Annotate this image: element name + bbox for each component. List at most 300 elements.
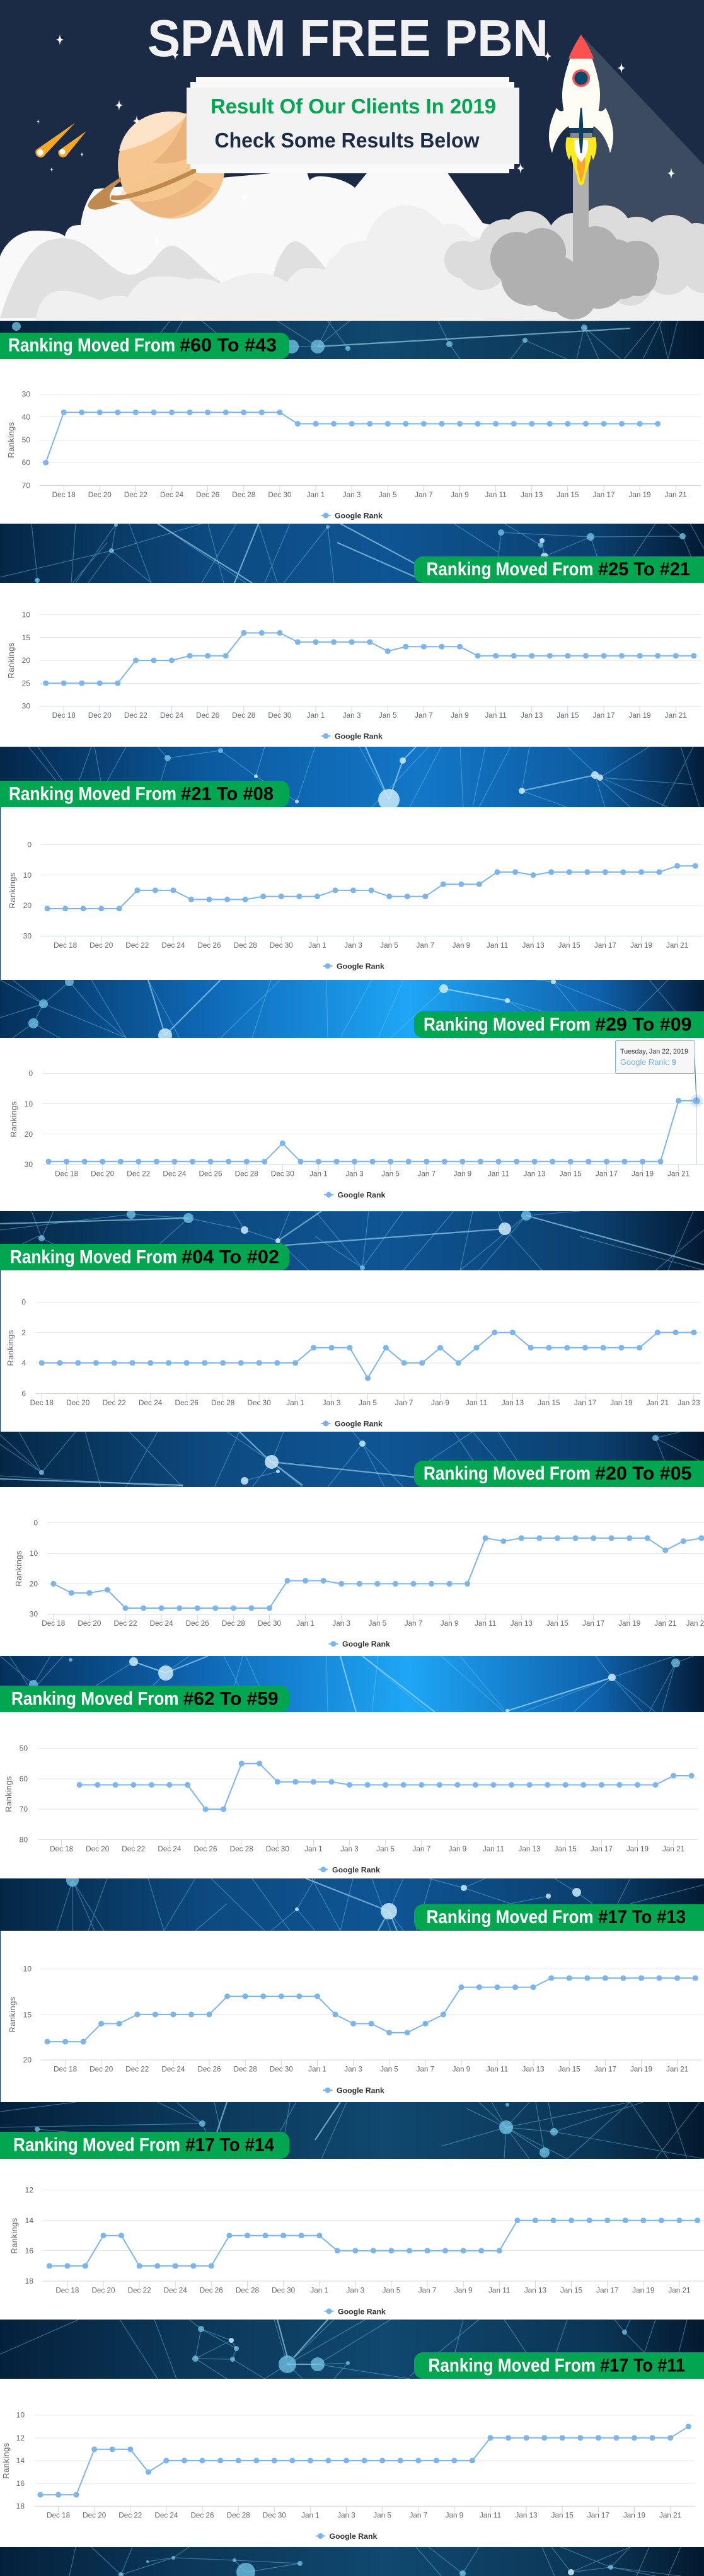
x axis (52, 706, 687, 720)
x axis: Dec 22 (125, 2066, 149, 2073)
x axis: Jan 9 (449, 1845, 466, 1853)
y axis title: Rankings (9, 2217, 19, 2254)
x axis: Dec 28 (230, 1845, 253, 1853)
y axis labels: 10 (23, 871, 32, 880)
x axis: Dec 26 (200, 2286, 223, 2295)
x axis: Jan 1 (310, 2286, 328, 2295)
y axis labels: 20 (23, 901, 32, 910)
ranking pill (0, 781, 289, 807)
y axis labels: 50 (22, 435, 30, 444)
ranking pill: #62 To #59 (183, 1689, 279, 1710)
ranking pill: Ranking Moved From (427, 559, 594, 580)
x axis: Jan 3 (347, 2286, 364, 2295)
x axis: Jan 3 (344, 941, 362, 950)
x axis: Jan 21 (647, 1399, 669, 1407)
x axis: Dec 24 (160, 491, 184, 499)
tooltip: Tuesday, Jan 22, 2019 (620, 1048, 688, 1055)
x axis: Jan 5 (369, 1619, 387, 1628)
y axis labels: 15 (23, 2010, 32, 2019)
x axis: Jan 11 (485, 491, 507, 499)
ranking pill: Ranking Moved From (429, 2355, 596, 2376)
x axis: Dec 20 (89, 2066, 113, 2073)
ranking pill: #20 To #05 (595, 1463, 692, 1484)
x axis: Dec 20 (83, 2512, 107, 2520)
x axis: Jan 15 (551, 2512, 574, 2520)
x axis: Dec 30 (268, 711, 292, 720)
x axis: Jan 1 (308, 941, 326, 950)
x axis: Jan 17 (594, 941, 616, 950)
x axis (30, 1394, 700, 1407)
ranking pill: #17 To #14 (185, 2135, 274, 2156)
x axis: Dec 26 (196, 491, 219, 499)
banner 10 (0, 2320, 704, 2379)
headline green: Result Of Our Clients In 2019 (211, 95, 496, 118)
legend: Google Rank (329, 2532, 378, 2541)
x axis: Dec 20 (88, 491, 112, 499)
chart 9 (9, 2185, 704, 2316)
x axis: Dec 24 (139, 1399, 163, 1407)
x axis: Jan 5 (379, 711, 397, 720)
x axis: Jan 21 (662, 1845, 684, 1853)
ranking pill: Ranking Moved From (9, 784, 176, 804)
x axis: Dec 24 (160, 711, 184, 720)
line series (47, 866, 695, 909)
chart 2 (6, 610, 701, 741)
x axis: Jan 13 (511, 1619, 533, 1628)
callout box (187, 77, 519, 173)
x axis: Jan 11 (480, 2512, 501, 2520)
y axis labels: 80 (20, 1835, 28, 1844)
x axis: Jan 19 (629, 491, 651, 499)
x axis: Dec 18 (55, 2286, 79, 2295)
x axis: Jan 13 (521, 711, 543, 720)
x axis: Dec 18 (52, 491, 76, 499)
y axis labels: 10 (16, 2411, 25, 2420)
y axis labels: 10 (22, 610, 30, 619)
x axis (52, 485, 687, 499)
y axis labels: 0 (33, 1519, 38, 1527)
x axis: Jan 9 (453, 2066, 470, 2073)
y axis labels: 0 (28, 1069, 33, 1078)
y axis labels: 16 (16, 2479, 25, 2488)
x axis: Jan 17 (596, 1170, 618, 1178)
ranking pill: Ranking Moved From (10, 1247, 177, 1268)
y axis title: Rankings (9, 1101, 18, 1137)
line series (40, 2427, 688, 2495)
y axis labels: 0 (21, 1298, 26, 1307)
banner 3 (0, 747, 704, 807)
y axis title: Rankings (6, 422, 16, 458)
x axis: Dec 22 (124, 491, 147, 499)
rocket (549, 35, 613, 185)
y axis labels: 4 (21, 1359, 26, 1367)
x axis: Dec 28 (234, 941, 257, 950)
x axis: Jan 11 (488, 2286, 510, 2295)
y axis labels (16, 2411, 25, 2510)
x axis: Jan 13 (522, 2066, 545, 2073)
x axis: Dec 24 (163, 1170, 187, 1178)
x axis: Jan 19 (626, 1845, 649, 1853)
x axis: Dec 28 (236, 2286, 259, 2295)
x axis: Jan 7 (417, 2066, 434, 2073)
faint stars on cloud (153, 192, 248, 247)
y axis labels: 50 (20, 1744, 28, 1753)
y axis title: Rankings (4, 1776, 13, 1812)
chart 1 (6, 389, 701, 520)
legend: Google Rank (342, 1640, 390, 1648)
x axis: Dec 18 (47, 2512, 70, 2520)
line series (47, 1978, 695, 2042)
x axis: Jan 21 (667, 1170, 690, 1178)
ranking pill: #17 To #13 (598, 1907, 686, 1928)
ranking pill: #21 To #08 (181, 784, 274, 804)
x axis: Jan 3 (343, 711, 361, 720)
x axis: Jan 3 (337, 2512, 355, 2520)
banner 5 (0, 1211, 704, 1270)
tooltip (615, 1041, 696, 1101)
x axis: Dec 30 (248, 1399, 271, 1407)
y axis title: Rankings (1, 2442, 11, 2479)
y axis labels: 60 (20, 1774, 28, 1783)
x axis: Jan 7 (405, 1619, 422, 1628)
hero illustration (0, 0, 704, 321)
x axis: Dec 18 (42, 1619, 65, 1628)
x axis: Jan 17 (587, 2512, 609, 2520)
x axis: Jan 7 (418, 1170, 436, 1178)
y axis labels: 30 (22, 702, 30, 711)
ranking pill: #60 To #43 (180, 335, 277, 355)
x axis: Jan 11 (487, 941, 508, 950)
x axis: Dec 28 (227, 2512, 250, 2520)
x axis: Dec 22 (113, 1619, 137, 1628)
x axis: Dec 24 (154, 2512, 178, 2520)
x axis: Jan 7 (395, 1399, 413, 1407)
y axis labels: 18 (25, 2277, 33, 2286)
x axis: Dec 24 (164, 2286, 187, 2295)
x axis: Jan 1 (301, 2512, 320, 2520)
x axis: Jan 17 (592, 491, 615, 499)
x axis: Jan 7 (418, 2286, 436, 2295)
x axis: Jan 13 (519, 1845, 541, 1853)
x axis: Jan 11 (487, 2066, 508, 2073)
x axis: Jan 13 (516, 2512, 538, 2520)
x axis: Dec 26 (197, 2066, 221, 2073)
y axis labels (25, 2185, 33, 2286)
x axis: Jan 1 (309, 1170, 328, 1178)
y axis labels: 12 (25, 2185, 33, 2194)
x axis: Dec 18 (55, 1170, 78, 1178)
line series (79, 1764, 691, 1809)
x axis: Jan 3 (344, 2066, 362, 2073)
ranking pill (0, 1244, 289, 1270)
x axis (47, 2506, 681, 2520)
y axis labels (22, 610, 30, 711)
x axis: Jan 5 (376, 1845, 395, 1853)
banner 1 (0, 321, 704, 359)
x axis: Jan 17 (592, 711, 615, 720)
x axis (54, 2060, 688, 2073)
x axis: Dec 20 (78, 1619, 101, 1628)
x axis: Jan 1 (296, 1619, 314, 1628)
x axis: Jan 11 (466, 1399, 487, 1407)
x axis: Dec 20 (91, 1170, 115, 1178)
y axis labels: 14 (16, 2456, 25, 2465)
x axis: Jan 19 (629, 711, 651, 720)
x axis: Dec 20 (86, 1845, 110, 1853)
x axis: Jan 15 (546, 1619, 568, 1628)
x axis: Dec 30 (268, 491, 292, 499)
ranking pill: Ranking Moved From (11, 1689, 179, 1710)
hovered point (690, 1095, 703, 1107)
light beam (584, 37, 704, 265)
x axis: Jan 19 (630, 2066, 652, 2073)
x axis: Jan 5 (373, 2512, 391, 2520)
x axis: Dec 22 (118, 2512, 142, 2520)
x axis: Jan 1 (307, 491, 325, 499)
x axis: Dec 26 (197, 941, 221, 950)
y axis labels: 10 (30, 1549, 38, 1558)
y axis title: Rankings (8, 872, 17, 909)
chart 8 (0, 1931, 702, 2102)
x axis: Jan 19 (623, 2512, 645, 2520)
y axis labels: 30 (30, 1610, 38, 1619)
y axis labels: 18 (16, 2502, 25, 2510)
x axis: Jan 11 (485, 711, 507, 720)
y axis labels: 14 (25, 2216, 33, 2225)
x axis: Jan 15 (538, 1399, 560, 1407)
legend: Google Rank (332, 1865, 380, 1874)
x axis: Jan 17 (594, 2066, 616, 2073)
x axis: Jan 1 (286, 1399, 304, 1407)
x axis: Jan 13 (521, 491, 543, 499)
x axis: Jan 15 (557, 491, 579, 499)
banner 8 (0, 1878, 704, 1931)
y axis labels: 60 (22, 458, 30, 467)
x axis: Jan 21 (654, 1619, 676, 1628)
ranking pill (414, 1461, 704, 1487)
x axis: Jan 3 (345, 1170, 364, 1178)
y axis labels: 40 (22, 413, 30, 422)
x axis: Dec 18 (54, 941, 77, 950)
x axis: Dec 22 (124, 711, 147, 720)
y axis title: Rankings (8, 1996, 17, 2033)
x axis: Dec 22 (127, 1170, 150, 1178)
x axis: Jan 17 (591, 1845, 613, 1853)
chart 10 (1, 2411, 695, 2541)
x axis: Dec 18 (30, 1399, 54, 1407)
line series (42, 1333, 694, 1378)
x axis (54, 936, 688, 950)
line series (46, 633, 694, 683)
y axis labels (30, 1519, 38, 1619)
x axis: Jan 19 (618, 1619, 640, 1628)
x axis: Jan 15 (555, 1845, 577, 1853)
y axis labels: 20 (23, 2056, 32, 2064)
x axis: Dec 28 (232, 491, 255, 499)
x axis: Dec 22 (125, 941, 149, 950)
y axis labels: 25 (22, 679, 30, 688)
y axis labels (21, 1298, 26, 1398)
y axis labels: 2 (21, 1328, 26, 1337)
x axis: Dec 26 (190, 2512, 214, 2520)
x axis: Dec 30 (270, 2066, 293, 2073)
front cloud (36, 205, 704, 321)
x axis: Jan 19 (630, 941, 652, 950)
y axis labels (25, 1069, 33, 1169)
x axis: Jan 15 (560, 2286, 583, 2295)
x axis: Jan 15 (558, 2066, 580, 2073)
smoke column (573, 158, 589, 265)
y axis labels: 6 (21, 1389, 26, 1398)
x axis: Jan 17 (574, 1399, 596, 1407)
x axis: Dec 26 (193, 1845, 217, 1853)
x axis: Dec 24 (161, 941, 185, 950)
x axis: Jan 11 (483, 1845, 504, 1853)
ranking pill: Ranking Moved From (424, 1015, 591, 1035)
x axis: Jan 15 (560, 1170, 582, 1178)
y axis labels: 10 (23, 1965, 32, 1974)
x axis: Jan 13 (524, 2286, 546, 2295)
x axis: Jan 19 (632, 1170, 654, 1178)
x axis: Jan 13 (524, 1170, 546, 1178)
x axis: Jan 5 (380, 941, 398, 950)
ranking pill: #17 To #11 (600, 2355, 685, 2376)
x axis: Jan 17 (582, 1619, 604, 1628)
ranking pill: #29 To #09 (595, 1015, 692, 1035)
x axis: Jan 1 (308, 2066, 326, 2073)
x axis: Dec 28 (222, 1619, 245, 1628)
banner 2 (0, 524, 704, 583)
x axis: Dec 22 (122, 1845, 145, 1853)
x axis: Jan 5 (380, 2066, 398, 2073)
x axis: Jan 5 (381, 1170, 400, 1178)
banner 11 (0, 2547, 704, 2576)
x axis: Jan 3 (332, 1619, 350, 1628)
x axis: Jan 3 (340, 1845, 359, 1853)
x axis: Jan 11 (475, 1619, 496, 1628)
legend: Google Rank (337, 962, 384, 970)
chart 3 (0, 807, 702, 980)
x axis: Jan 17 (596, 2286, 618, 2295)
x axis: Dec 28 (232, 711, 255, 720)
x axis: Jan 15 (557, 711, 579, 720)
x axis: Dec 30 (271, 1170, 294, 1178)
x axis: Dec 26 (196, 711, 219, 720)
x axis: Jan 1 (307, 711, 325, 720)
ranking pill (414, 556, 704, 583)
grey mountains (0, 238, 227, 318)
x axis: Dec 24 (161, 2066, 185, 2073)
x axis: Jan 5 (359, 1399, 377, 1407)
ranking pill: Ranking Moved From (8, 335, 175, 355)
line series (49, 1101, 696, 1161)
x axis: Dec 18 (52, 711, 76, 720)
x axis: Dec 28 (235, 1170, 258, 1178)
chart 7 (4, 1744, 698, 1874)
x axis: Dec 18 (50, 1845, 73, 1853)
legend: Google Rank (335, 1419, 383, 1428)
y axis labels: 12 (16, 2434, 25, 2442)
back grey smoke (444, 205, 704, 306)
x axis: Dec 22 (103, 1399, 126, 1407)
x axis: Jan 23 (678, 1399, 700, 1407)
line series (49, 2221, 697, 2266)
y axis labels: 20 (30, 1579, 38, 1588)
x axis: Jan 7 (410, 2512, 427, 2520)
x axis: Dec 20 (66, 1399, 90, 1407)
x axis: Jan 9 (441, 1619, 458, 1628)
x axis: Dec 28 (211, 1399, 235, 1407)
y axis labels: 30 (25, 1160, 33, 1169)
ranking pill (0, 1686, 289, 1712)
y axis labels: 20 (25, 1130, 33, 1139)
ranking pill: #25 To #21 (598, 559, 690, 580)
y axis title: Rankings (14, 1550, 23, 1587)
x axis: Jan 9 (451, 491, 469, 499)
meteors (35, 122, 86, 158)
x axis: Dec 30 (263, 2512, 286, 2520)
ranking pill (0, 2132, 289, 2159)
subheadline: Check Some Results Below (214, 129, 480, 152)
x axis: Dec 30 (258, 1619, 282, 1628)
x axis: Jan 15 (558, 941, 580, 950)
ranking pill (414, 1011, 704, 1038)
ranking pill: Ranking Moved From (13, 2135, 180, 2156)
y axis labels: 70 (20, 1805, 28, 1814)
y axis labels: 0 (27, 841, 32, 849)
x axis: Dec 20 (88, 711, 112, 720)
chart 6 (14, 1519, 704, 1648)
chart 4 (9, 1040, 704, 1200)
x axis: Jan 13 (502, 1399, 524, 1407)
y axis labels (20, 1744, 28, 1844)
y axis labels: 70 (22, 481, 30, 490)
x axis: Dec 26 (175, 1399, 199, 1407)
x axis: Jan 7 (417, 941, 434, 950)
ranking pill (0, 333, 289, 359)
x axis: Jan 11 (488, 1170, 509, 1178)
y axis labels (23, 841, 32, 940)
x axis: Jan 9 (453, 941, 470, 950)
x axis: Jan 19 (610, 1399, 633, 1407)
y axis labels: 16 (25, 2246, 33, 2255)
ranking pill: Ranking Moved From (427, 1907, 594, 1928)
x axis: Jan 7 (413, 1845, 430, 1853)
x axis: Dec 24 (158, 1845, 182, 1853)
legend: Google Rank (335, 732, 383, 741)
x axis (42, 1614, 704, 1628)
line series (54, 1538, 701, 1608)
x axis: Jan 9 (454, 1170, 471, 1178)
chart 5 (0, 1270, 701, 1432)
legend: Google Rank (338, 1191, 386, 1200)
x axis: Jan 9 (454, 2286, 472, 2295)
x axis: Jan 1 (304, 1845, 323, 1853)
tooltip: Google Rank: 9 (620, 1057, 676, 1067)
y axis labels: 30 (22, 389, 30, 398)
x axis: Jan 7 (415, 491, 433, 499)
ranking pill: #04 To #02 (182, 1247, 279, 1268)
x axis: Jan 13 (522, 941, 545, 950)
banner 9 (0, 2102, 704, 2159)
y axis title: Rankings (6, 1330, 15, 1366)
x axis: Jan 3 (323, 1399, 340, 1407)
x axis (55, 2281, 690, 2295)
x axis: Dec 20 (91, 2286, 115, 2295)
x axis: Jan 7 (415, 711, 433, 720)
x axis: Jan 21 (666, 2066, 688, 2073)
y axis labels: 30 (23, 931, 32, 940)
